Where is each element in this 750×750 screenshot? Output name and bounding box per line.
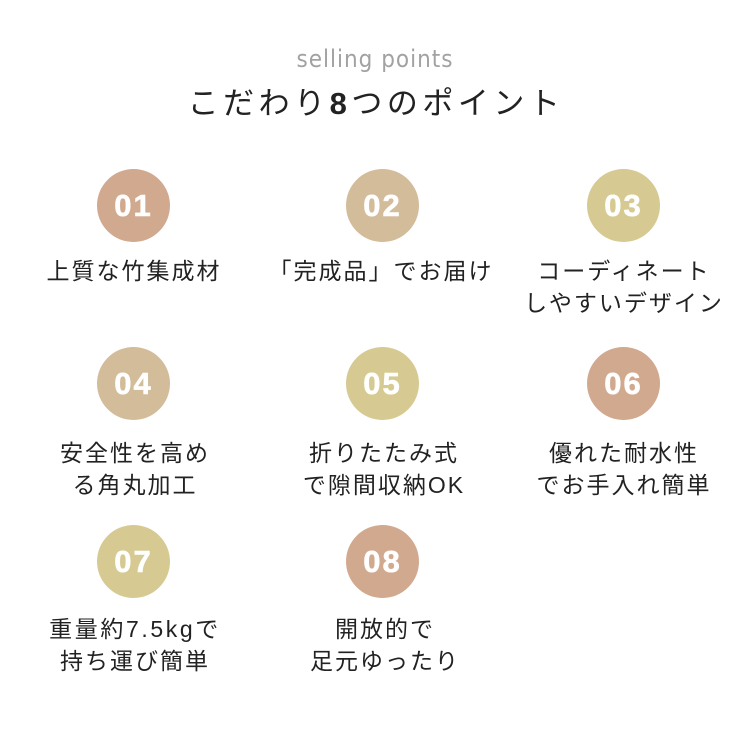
badge 07 — [97, 525, 170, 598]
label 04: 安全性を高め — [60, 440, 210, 466]
badge 04 — [97, 347, 170, 420]
label 01: 上質な竹集成材 — [46, 258, 222, 284]
label 07: 持ち運び簡単 — [60, 648, 210, 674]
label 03: コーディネート — [537, 258, 711, 284]
badge 03 — [587, 169, 660, 242]
label 05: 折りたたみ式 — [309, 440, 459, 466]
label 05 — [303, 440, 465, 498]
label 08 — [310, 616, 460, 674]
label 08: 開放的で — [335, 616, 435, 642]
badge 06: 06 — [604, 366, 643, 401]
label 05: で隙間収納OK — [303, 472, 465, 498]
label 06 — [536, 440, 712, 498]
badge 08 — [346, 525, 419, 598]
badge 01: 01 — [114, 188, 153, 223]
badge 05: 05 — [363, 366, 402, 401]
badge 08: 08 — [363, 544, 402, 579]
badge 02: 02 — [363, 188, 402, 223]
label 03 — [524, 258, 724, 316]
badge 02 — [346, 169, 419, 242]
label 03: しやすいデザイン — [524, 290, 724, 316]
badge 07: 07 — [114, 544, 153, 579]
label 07 — [49, 616, 221, 674]
badge 04: 04 — [114, 366, 153, 401]
badge 06 — [587, 347, 660, 420]
label 08: 足元ゆったり — [310, 648, 460, 674]
label 07: 重量約7.5kgで — [49, 616, 221, 642]
badge 03: 03 — [604, 188, 643, 223]
label 06: でお手入れ簡単 — [536, 472, 712, 498]
badge 01 — [97, 169, 170, 242]
badge 05 — [346, 347, 419, 420]
label 06: 優れた耐水性 — [549, 440, 699, 466]
label 02: 「完成品」でお届け — [268, 258, 494, 284]
label 04: る角丸加工 — [72, 472, 198, 498]
label 04 — [60, 440, 210, 498]
title: こだわり8つのポイント — [188, 86, 564, 121]
subtitle: selling points — [296, 45, 454, 73]
